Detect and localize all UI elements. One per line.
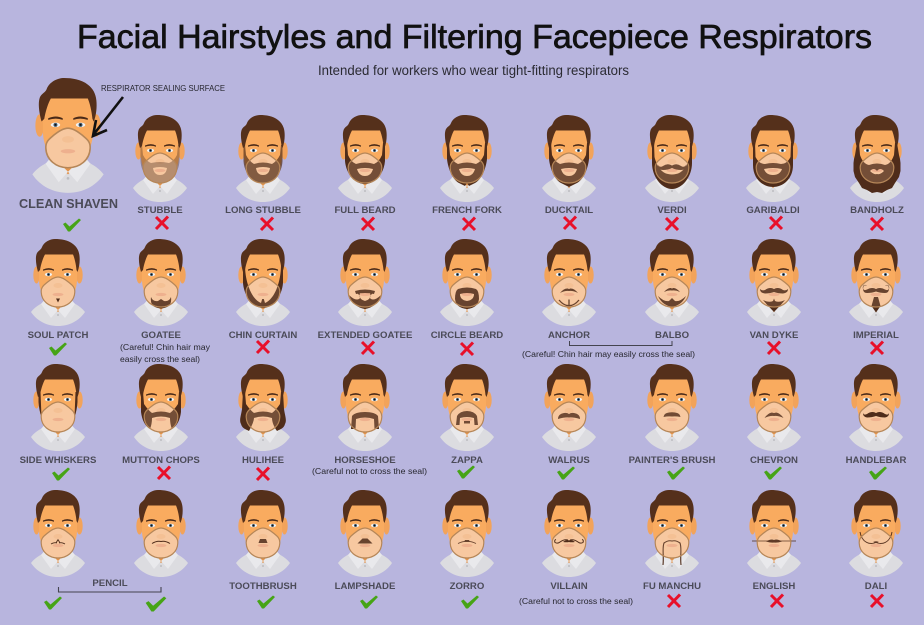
mark: not acceptable — [362, 342, 374, 354]
label: clean shaven: CLEAN SHAVEN — [19, 196, 118, 211]
label: stubble: STUBBLE — [137, 205, 183, 216]
figure: full beard — [334, 115, 396, 230]
figure: soul patch — [28, 239, 88, 356]
figure: fu manchu — [643, 490, 701, 607]
figure: hulihee — [236, 364, 290, 480]
bracket: pencil — [58, 587, 161, 592]
bracket: anchor and balbo — [570, 341, 672, 346]
mark: not acceptable — [770, 216, 782, 229]
mark: not acceptable — [257, 468, 269, 480]
figure: zappa — [440, 364, 494, 478]
figure: circle beard — [431, 239, 503, 355]
label: handlebar: HANDLEBAR — [846, 455, 906, 466]
figure: clean shaven — [19, 78, 118, 232]
mark: acceptable — [49, 342, 67, 356]
label: extended goatee: EXTENDED GOATEE — [318, 330, 413, 341]
figure: english — [747, 490, 801, 607]
mark: not acceptable — [156, 216, 168, 229]
label: english: ENGLISH — [753, 581, 795, 592]
mark: not acceptable — [461, 342, 473, 355]
figure: van dyke — [747, 239, 801, 354]
figure: goatee — [120, 239, 211, 364]
mark: not acceptable — [768, 342, 780, 354]
figure: stubble — [133, 115, 187, 229]
mark: not acceptable — [871, 218, 883, 230]
figure: pencil right — [134, 490, 188, 611]
figure: bandholz — [850, 115, 904, 230]
label: garibaldi: GARIBALDI — [746, 205, 800, 216]
label: mutton chops: MUTTON CHOPS — [122, 455, 200, 466]
mark: acceptable — [360, 596, 378, 608]
note: goatee caution — [120, 342, 211, 364]
note: horseshoe caution: (Careful not to cross the seal) — [312, 466, 427, 476]
label: verdi: VERDI — [657, 205, 687, 216]
mark: acceptable — [457, 466, 475, 478]
mark: acceptable — [764, 466, 782, 480]
label: pencil: PENCIL — [92, 578, 128, 589]
label: zorro: ZORRO — [450, 581, 485, 592]
mark: not acceptable — [362, 218, 374, 230]
figure: handlebar — [846, 364, 906, 480]
figure: anchor — [542, 239, 596, 341]
figure: ducktail — [542, 115, 596, 229]
label: soul patch: SOUL PATCH — [28, 330, 88, 341]
figure: walrus — [542, 364, 596, 480]
label: side whiskers: SIDE WHISKERS — [20, 455, 97, 466]
mark: not acceptable — [261, 218, 273, 230]
figure: dali — [849, 490, 903, 607]
arrow: to sealing surface — [93, 97, 123, 136]
label: painter's brush: PAINTER'S BRUSH — [629, 455, 715, 466]
label: bandholz: BANDHOLZ — [850, 205, 904, 216]
mark: acceptable — [869, 466, 887, 480]
face: clean shaven — [32, 78, 104, 193]
label: goatee: GOATEE — [141, 330, 181, 341]
label: dali: DALI — [865, 581, 888, 592]
title: Facial Hairstyles and Filtering Facepiece Respirators — [77, 18, 872, 55]
mark: not acceptable — [871, 594, 883, 607]
label: circle beard: CIRCLE BEARD — [431, 330, 503, 341]
label: walrus: WALRUS — [548, 455, 590, 466]
mark: not acceptable — [771, 594, 783, 607]
note: goatee caution: easily cross the seal) — [120, 354, 200, 364]
mark: not acceptable — [158, 466, 170, 479]
label: horseshoe: HORSESHOE — [334, 455, 396, 466]
callout: respirator sealing surface: RESPIRATOR SEALING SURFACE — [101, 83, 225, 93]
figure: side whiskers — [20, 364, 97, 480]
note: goatee caution: (Careful! Chin hair may — [120, 342, 211, 352]
mark: acceptable — [667, 466, 685, 480]
mark: not acceptable — [871, 342, 883, 354]
label: chin curtain: CHIN CURTAIN — [229, 330, 297, 341]
mark: not acceptable — [463, 218, 475, 230]
label: toothbrush: TOOTHBRUSH — [229, 581, 297, 592]
mark: not acceptable — [666, 218, 678, 230]
label: french fork: FRENCH FORK — [432, 205, 502, 216]
mark: acceptable — [52, 468, 70, 480]
figure: painter's brush — [629, 364, 715, 480]
mark: not acceptable — [257, 340, 269, 353]
figure: zorro — [440, 490, 494, 608]
label: lampshade: LAMPSHADE — [335, 581, 396, 592]
mark: acceptable — [146, 597, 166, 611]
mark: acceptable — [557, 466, 575, 480]
figure: french fork — [432, 115, 502, 230]
label: van dyke: VAN DYKE — [750, 330, 799, 341]
figure: villain — [519, 490, 633, 606]
mark: acceptable — [257, 596, 275, 608]
label: balbo: BALBO — [655, 330, 690, 341]
figure: mutton chops — [122, 364, 200, 479]
subtitle: Intended for workers who wear tight-fitting respirators — [318, 63, 629, 78]
figure: extended goatee — [318, 239, 413, 354]
label: ducktail: DUCKTAIL — [545, 205, 593, 216]
label: zappa: ZAPPA — [451, 455, 483, 466]
figure: chin curtain — [229, 239, 297, 353]
label: villain: VILLAIN — [550, 581, 588, 592]
figure: chevron — [747, 364, 801, 480]
mark: acceptable — [44, 596, 62, 610]
label: anchor: ANCHOR — [548, 330, 590, 341]
figure: imperial — [849, 239, 903, 354]
figure: balbo — [645, 239, 699, 341]
mark: acceptable — [461, 596, 479, 608]
figure: long stubble — [225, 115, 301, 230]
note: villain caution: (Careful not to cross the seal) — [519, 596, 633, 606]
figure: horseshoe — [312, 364, 427, 476]
figure: garibaldi — [746, 115, 800, 229]
figure: pencil left — [31, 490, 85, 610]
label: hulihee: HULIHEE — [242, 455, 285, 466]
mark: not acceptable — [564, 216, 576, 229]
label: chevron: CHEVRON — [750, 455, 798, 466]
label: fu manchu: FU MANCHU — [643, 581, 701, 592]
figure: lampshade — [335, 490, 396, 608]
label: full beard: FULL BEARD — [334, 205, 396, 216]
label: imperial: IMPERIAL — [853, 330, 899, 341]
label: long stubble: LONG STUBBLE — [225, 205, 301, 216]
figure: toothbrush — [229, 490, 297, 608]
mark: not acceptable — [668, 594, 680, 607]
note: anchor and balbo caution: (Careful! Chin hair may easily cross the seal) — [522, 349, 695, 359]
mark: acceptable — [63, 218, 81, 232]
figure: verdi — [645, 115, 699, 230]
